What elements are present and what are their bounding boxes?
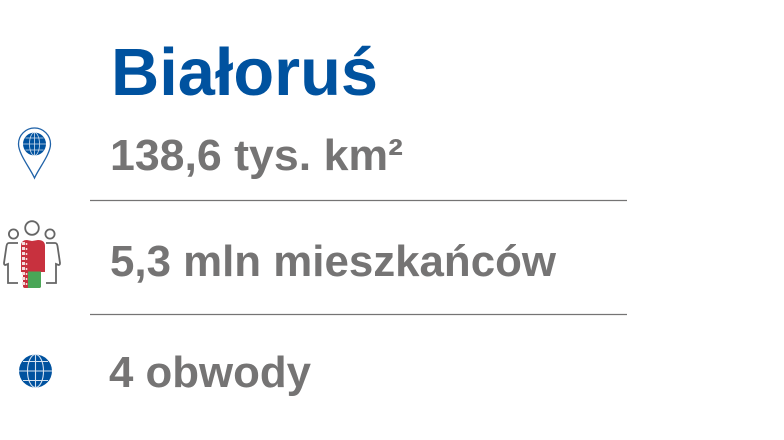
population text: 5,3 mln mieszkańców [110, 237, 557, 286]
icon: map pin with globe [18, 128, 50, 178]
title: Białoruś [111, 35, 378, 110]
icon: globe [19, 354, 52, 388]
regions text: 4 obwody [109, 348, 312, 397]
area text: 138,6 tys. km² [110, 131, 403, 180]
icon: people with Belarus flag [4, 221, 60, 288]
